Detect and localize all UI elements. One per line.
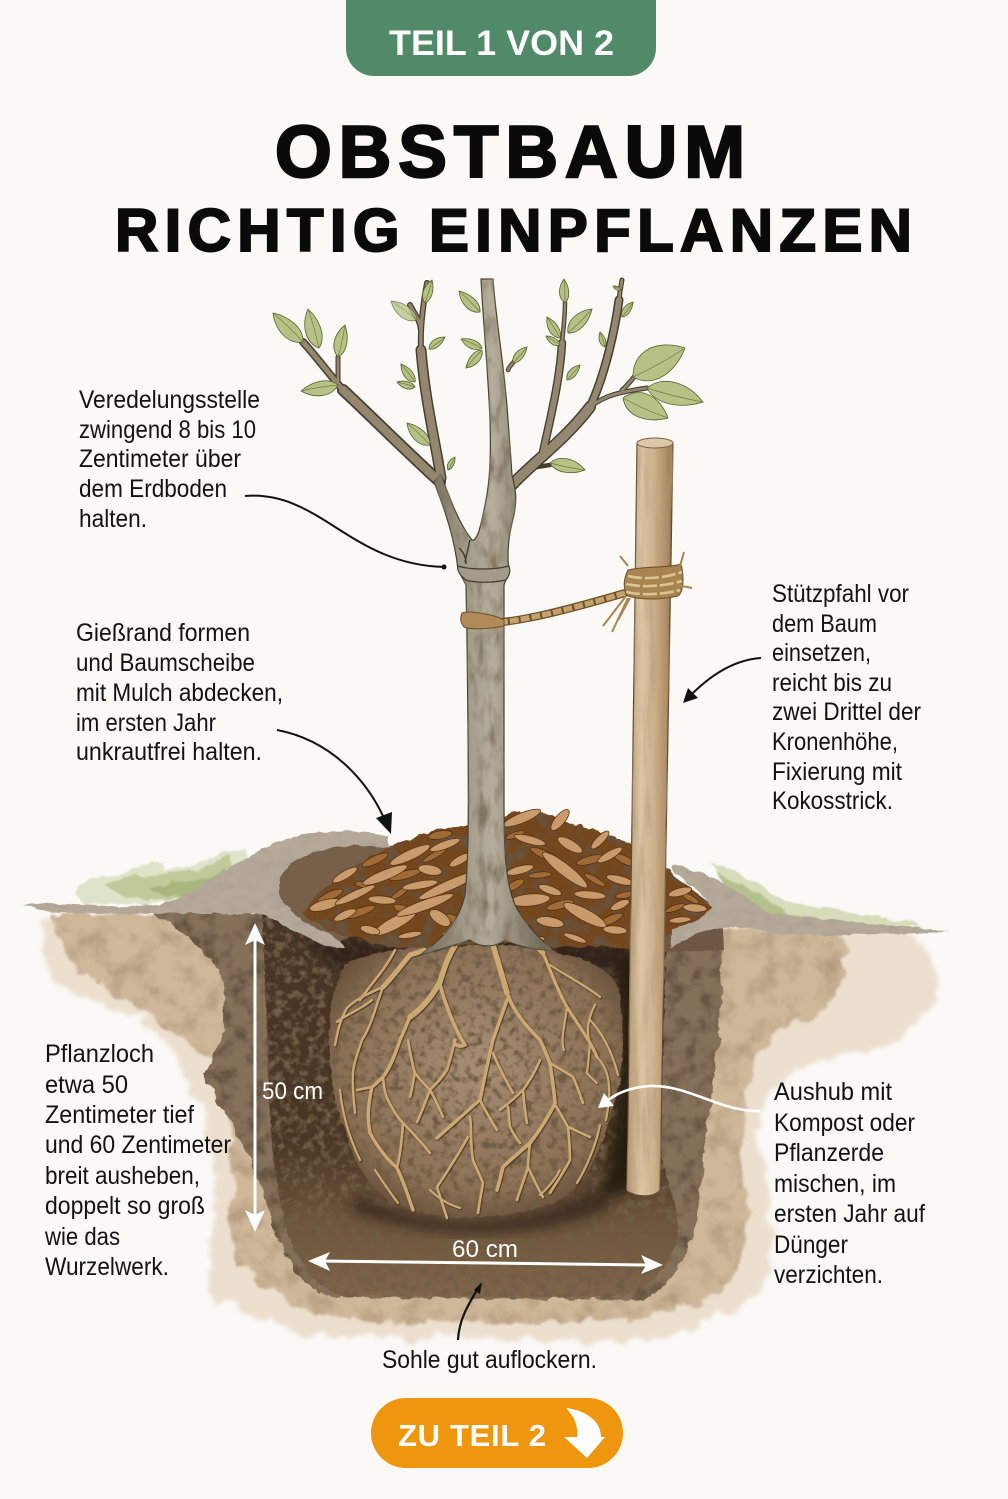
title: OBSTBAUM (275, 112, 745, 193)
text: Pflanzloch: etwa 50 (45, 1071, 128, 1099)
text: Aushub: Pflanzerde (774, 1139, 884, 1167)
text: Pflanzloch: Zentimeter tief (45, 1101, 194, 1129)
text: Pflanzloch: doppelt so groß (45, 1192, 205, 1220)
root ball (329, 928, 623, 1218)
coconut rope (461, 552, 692, 632)
text: Gießrand: im ersten Jahr (76, 709, 216, 737)
dimension: 50 cm depth (245, 923, 323, 1232)
text: Pflanzloch: breit ausheben, (45, 1162, 200, 1190)
text: Stützpfahl: Kokosstrick. (772, 787, 893, 815)
light watercolour wash (40, 915, 938, 1345)
button: Zu Teil 2: ZU TEIL 2 (398, 1418, 546, 1453)
text: Aushub: verzichten. (774, 1261, 883, 1289)
text: Stützpfahl: Fixierung mit (772, 758, 902, 786)
text: Veredelungsstelle: Veredelungsstelle (79, 386, 260, 414)
trunk with root flare (420, 279, 552, 955)
grass tufts (77, 848, 925, 932)
text: Veredelungsstelle: halten. (79, 505, 147, 533)
text: Gießrand (76, 619, 283, 766)
dimension: 60 cm width (308, 1236, 663, 1274)
text: Pflanzloch: wie das (44, 1223, 120, 1251)
text: Pflanzloch: und 60 Zentimeter (45, 1131, 231, 1159)
mid-tone soil (50, 912, 846, 1324)
callout arrow: Sohle (458, 1282, 482, 1340)
dark shadow gap beside stake (600, 955, 650, 1200)
under-fill behind mulch and rims (274, 839, 724, 952)
mulch flakes dark layer (316, 829, 700, 931)
text: Veredelungsstelle: dem Erdboden (79, 475, 227, 503)
icon: curved arrow down (564, 1408, 605, 1458)
text: Aushub: ersten Jahr auf (774, 1200, 925, 1228)
support stake (627, 438, 673, 1196)
hole wall gray-brown (150, 910, 722, 1300)
title (115, 112, 912, 264)
text: Pflanzloch (44, 1040, 231, 1281)
dimension: 60 cm width: 60 cm (452, 1236, 518, 1263)
text: Stützpfahl: Stützpfahl vor (772, 580, 909, 608)
title: RICHTIG EINPFLANZEN (115, 197, 912, 264)
text: Stützpfahl: einsetzen, (772, 639, 871, 667)
button: Zu Teil 2 (371, 1398, 623, 1468)
text: Sohle: Sohle gut auflockern. (382, 1346, 597, 1374)
text: Aushub: Kompost oder (774, 1109, 915, 1137)
text: Gießrand: mit Mulch abdecken, (76, 679, 283, 707)
callout arrow: Veredelungsstelle (245, 496, 446, 570)
text: Stützpfahl (772, 580, 921, 815)
graft union (458, 566, 510, 582)
text: Stützpfahl: zwei Drittel der (772, 698, 921, 726)
callout arrow: Stützpfahl (683, 658, 761, 703)
leaves (267, 279, 706, 476)
text: Stützpfahl: Kronenhöhe, (772, 728, 898, 756)
mulch flakes light layer (308, 806, 707, 945)
text: Aushub: Dünger (774, 1231, 848, 1259)
text: Veredelungsstelle: zwingend 8 bis 10 (79, 416, 256, 444)
callout arrow: Gießrand (277, 730, 392, 834)
text: Stützpfahl: dem Baum (772, 610, 877, 638)
top badge: Teil 1 von 2 (346, 0, 656, 76)
text: Stützpfahl: reicht bis zu (772, 669, 892, 697)
branches (303, 280, 647, 485)
dimension: 50 cm depth: 50 cm (262, 1078, 323, 1105)
text: Aushub: mischen, im (774, 1170, 896, 1198)
text: Veredelungsstelle: Zentimeter über (79, 445, 241, 473)
soil cross-section (40, 910, 938, 1345)
mulch mound (300, 806, 712, 948)
callout arrow: Aushub (598, 1086, 760, 1111)
hole interior (262, 915, 678, 1297)
text: Aushub: Aushub mit (774, 1078, 892, 1106)
right rim (670, 865, 950, 948)
text: Pflanzloch: Pflanzloch (45, 1040, 154, 1068)
text: Pflanzloch: Wurzelwerk. (45, 1253, 169, 1281)
roots (335, 928, 618, 1218)
text: Aushub (774, 1078, 925, 1289)
text: Gießrand: und Baumscheibe (76, 649, 255, 677)
top badge: Teil 1 von 2: TEIL 1 VON 2 (389, 24, 614, 63)
text: Gießrand: unkrautfrei halten. (76, 738, 262, 766)
text: Gießrand: Gießrand formen (76, 619, 250, 647)
tree (267, 279, 706, 955)
text: Veredelungsstelle (79, 386, 260, 533)
left rim (22, 831, 390, 948)
planting-rim mounds (22, 831, 950, 948)
